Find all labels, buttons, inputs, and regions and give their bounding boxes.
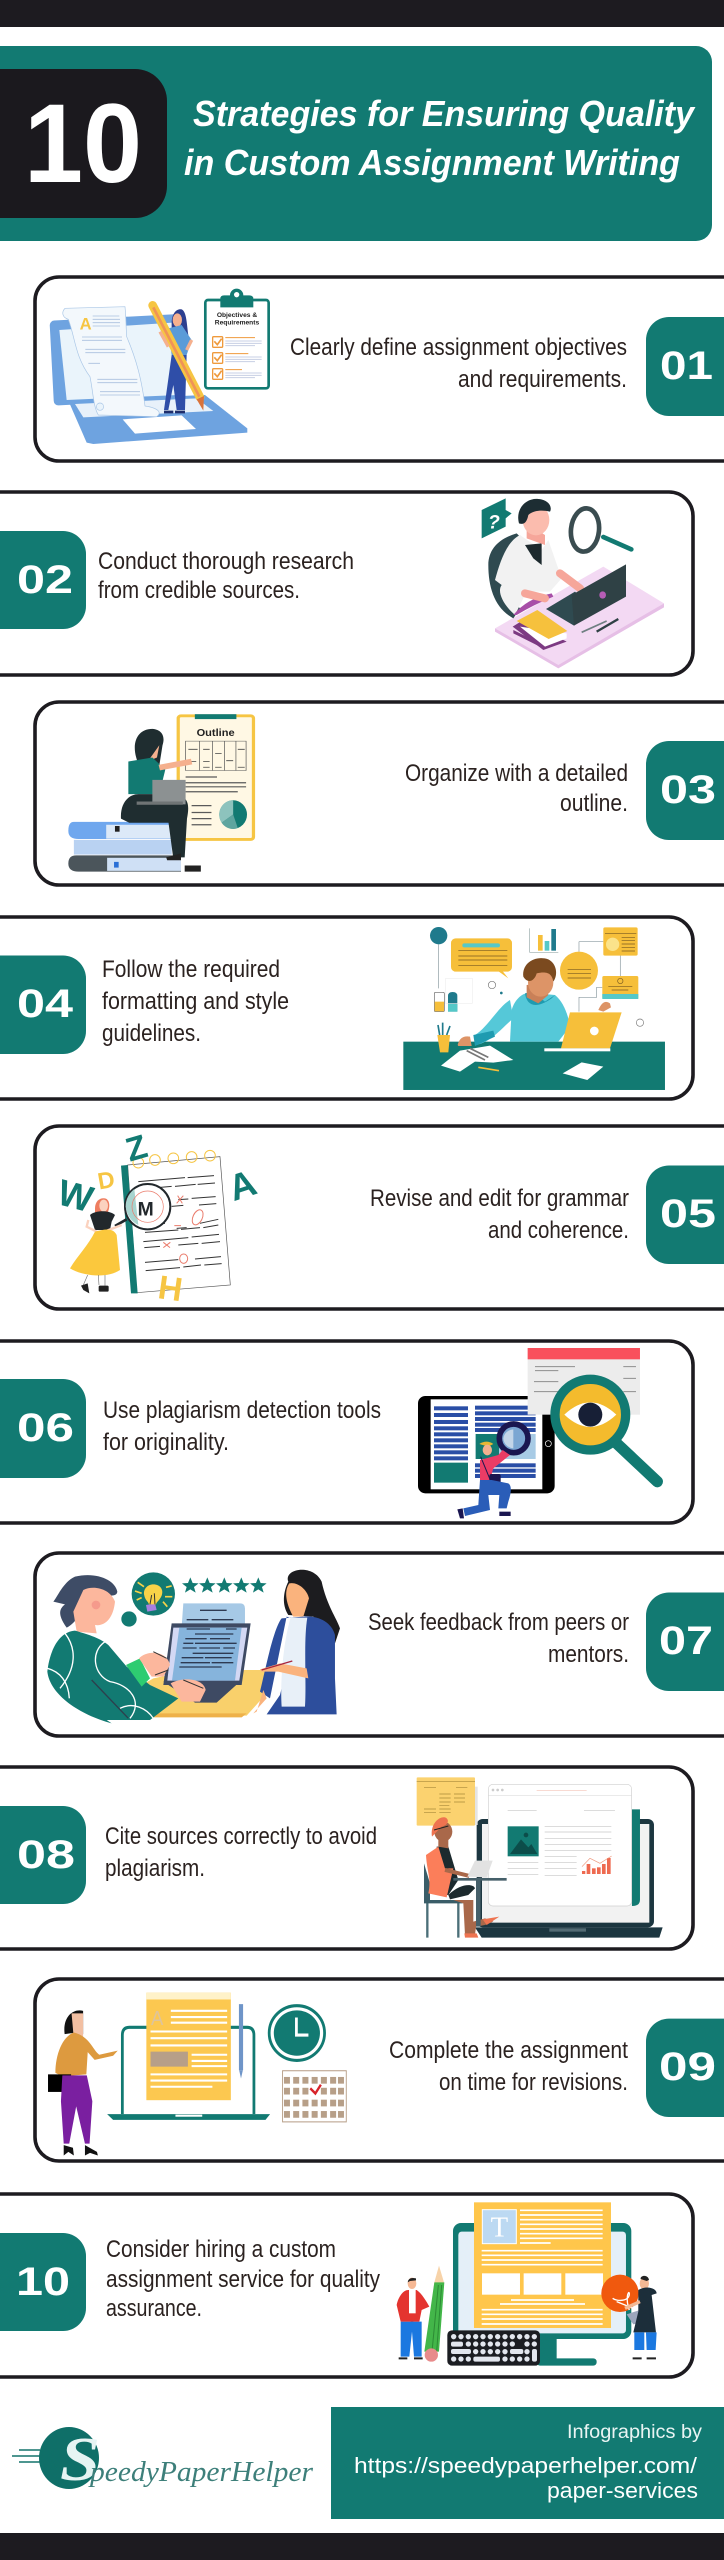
- logo S initial: S: [60, 2426, 100, 2494]
- step text: Complete the assignment: [389, 2037, 628, 2064]
- number tab 02: [0, 531, 86, 629]
- illustration: woman proofreading with magnifier: [53, 1128, 261, 1309]
- illustration: woman proofreading with magnifier: W: [53, 1172, 98, 1220]
- step text: assignment service for quality: [106, 2266, 380, 2293]
- panel 10: [0, 2194, 693, 2377]
- step text: Organize with a detailed: [405, 760, 628, 787]
- step text: [405, 760, 628, 817]
- logo emblem: [39, 2427, 99, 2489]
- number tab 03: [646, 741, 724, 840]
- step text: and coherence.: [488, 1217, 629, 1244]
- step text: [105, 1823, 377, 1882]
- credit text: https://speedypaperhelper.com/: [354, 2453, 698, 2478]
- step text: [389, 2037, 628, 2096]
- step text: Cite sources correctly to avoid: [105, 1823, 377, 1850]
- number tab 06: 06: [17, 1406, 74, 1450]
- number tab 05: 05: [660, 1192, 716, 1236]
- credit text: [354, 2422, 703, 2503]
- step text: Use plagiarism detection tools: [103, 1397, 381, 1424]
- step text: Clearly define assignment objectives: [290, 334, 627, 361]
- illustration: woman at table with large laptop screen: [417, 1777, 663, 1938]
- number tab 10: 10: [16, 2260, 70, 2304]
- illustration: woman proofreading with magnifier: A: [223, 1162, 261, 1209]
- step text: on time for revisions.: [439, 2069, 628, 2096]
- number tab 03: 03: [660, 768, 716, 812]
- illustration: woman with pencil on laptop and checklist: [50, 289, 269, 444]
- panel frame: [35, 702, 724, 885]
- step text: from credible sources.: [98, 577, 300, 604]
- number tab 05: [646, 1166, 724, 1264]
- panel frame: [0, 1341, 693, 1523]
- illustration: tablet and eye magnifier: [418, 1348, 657, 1518]
- step text: [102, 956, 289, 1047]
- number tab 04: 04: [17, 982, 74, 1026]
- panel 08: [0, 1767, 693, 1949]
- illustration: woman presenting laptop, clock and calendar: [48, 1993, 346, 2155]
- number tab 09: [646, 2019, 724, 2117]
- illustration: woman proofreading with magnifier: H: [156, 1269, 185, 1309]
- panel 05: [35, 1126, 724, 1309]
- logo: SpeedyPaperHelper: [12, 2426, 314, 2494]
- number tab 02: 02: [17, 558, 73, 602]
- credit text: Infographics by: [567, 2422, 703, 2443]
- number tab 04: [0, 956, 86, 1054]
- panel frame: [35, 277, 724, 461]
- title: [184, 93, 696, 183]
- step text: for originality.: [103, 1429, 229, 1456]
- illustration: woman presenting laptop, clock and calendar: A: [151, 2007, 164, 2030]
- panel 07: [35, 1553, 724, 1736]
- panel 09: [35, 1979, 724, 2161]
- illustration: monitor with document, people, keyboard: [397, 2202, 657, 2366]
- number tab 07: [646, 1592, 724, 1691]
- panel frame: [35, 1979, 724, 2161]
- panel frame: [0, 917, 693, 1099]
- number tab 01: 01: [660, 344, 713, 388]
- step text: formatting and style: [102, 988, 289, 1015]
- step text: [370, 1185, 629, 1244]
- panel frame: [35, 1126, 724, 1309]
- step text: outline.: [560, 790, 628, 817]
- big number 10: 10: [24, 81, 142, 206]
- illustration: woman proofreading with magnifier: Z: [122, 1128, 152, 1169]
- illustration: researcher at laptop: [482, 498, 664, 668]
- illustration: woman sitting on books with outline board: [68, 714, 253, 872]
- panel 06: [0, 1341, 693, 1523]
- number tab 06: [0, 1379, 86, 1478]
- illustration: researcher at laptop: ?: [488, 512, 500, 533]
- illustration: woman proofreading with magnifier: D: [96, 1166, 117, 1194]
- panel frame: [35, 1553, 724, 1736]
- panel 01: [35, 277, 724, 461]
- step text: Conduct thorough research: [98, 548, 354, 575]
- step text: and requirements.: [458, 366, 627, 393]
- step text: [368, 1609, 629, 1668]
- step text: assurance.: [106, 2295, 202, 2322]
- panel frame: [0, 492, 693, 675]
- title: Strategies for Ensuring Quality: [193, 93, 696, 134]
- number tab 07: 07: [659, 1619, 713, 1663]
- panel 03: [35, 702, 724, 885]
- step text: plagiarism.: [105, 1855, 205, 1882]
- panel 02: [0, 492, 693, 675]
- step text: Revise and edit for grammar: [370, 1185, 629, 1212]
- step text: [103, 1397, 381, 1456]
- illustration: woman proofreading with magnifier: M: [138, 1200, 154, 1221]
- illustration: woman with pencil on laptop and checklist: Objectives &: [217, 312, 257, 319]
- number tab 09: 09: [659, 2045, 716, 2089]
- title: in Custom Assignment Writing: [184, 142, 680, 183]
- panel 04: [0, 917, 693, 1099]
- step text: [98, 548, 354, 604]
- step text: [106, 2236, 380, 2322]
- credit background: [331, 2407, 724, 2519]
- number tab 10: [0, 2233, 86, 2331]
- step text: guidelines.: [102, 1020, 201, 1047]
- top bar: [0, 0, 724, 27]
- illustration: reviewer and student with laptop: [47, 1570, 340, 1723]
- number tab 08: 08: [17, 1833, 75, 1877]
- logo speed lines: [12, 2450, 40, 2462]
- bottom bar: [0, 2533, 724, 2560]
- credit text: paper-services: [547, 2478, 698, 2503]
- step text: Follow the required: [102, 956, 280, 983]
- number badge: [0, 69, 167, 218]
- panel frame: [0, 1767, 693, 1949]
- illustration: woman sitting on books with outline board: Outline: [197, 728, 235, 739]
- header banner: [0, 46, 712, 241]
- step text: Seek feedback from peers or: [368, 1609, 629, 1636]
- number tab 08: [0, 1806, 86, 1904]
- footer credit box: [331, 2407, 724, 2519]
- illustration: woman with pencil on laptop and checklist: Requirements: [215, 320, 259, 327]
- illustration: woman with pencil on laptop and checklist: A: [80, 314, 92, 333]
- panel frame: [0, 2194, 693, 2377]
- banner background: [0, 46, 712, 241]
- illustration: monitor with document, people, keyboard: T: [491, 2212, 509, 2244]
- logo wordmark: peedyPaperHelper: [88, 2456, 314, 2488]
- step text: Consider hiring a custom: [106, 2236, 336, 2263]
- step text: mentors.: [548, 1641, 629, 1668]
- illustration: man working at teal desk: [403, 927, 665, 1090]
- number tab 01: [646, 317, 724, 416]
- step text: [290, 334, 627, 393]
